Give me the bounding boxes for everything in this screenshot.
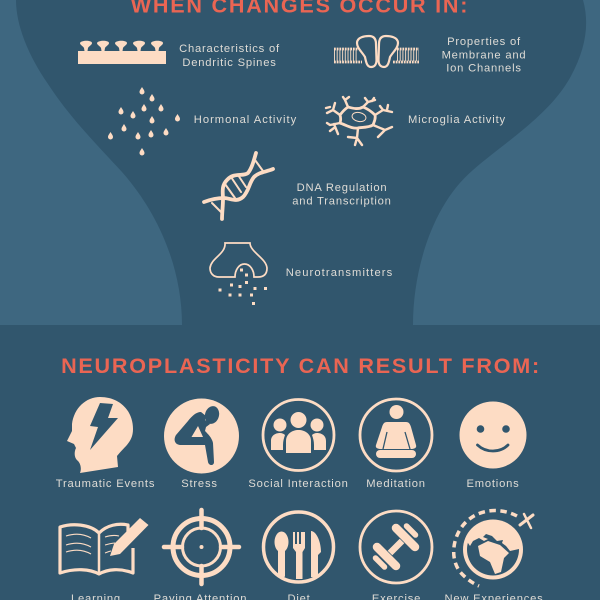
- label: dna regulation: and Transcription: [292, 195, 392, 207]
- icon: traumatic events head: [67, 397, 133, 473]
- label: neurotransmitters: Neurotransmitters: [286, 267, 393, 279]
- label: emotions: Emotions: [466, 478, 520, 490]
- label: stress: Stress: [181, 478, 218, 490]
- label: membrane: Ion Channels: [446, 63, 522, 75]
- icon: exercise dumbbell: [360, 511, 432, 583]
- funnel panel: [16, 0, 586, 325]
- label: membrane: Membrane and: [442, 49, 526, 61]
- icon: microglia: [326, 97, 392, 145]
- heading: neuroplasticity: NEUROPLASTICITY CAN RESULT FROM:: [61, 353, 541, 378]
- label: meditation: Meditation: [366, 478, 426, 490]
- label: dendritic spines: Dendritic Spines: [182, 57, 277, 69]
- label: traumatic events: Traumatic Events: [56, 478, 155, 490]
- icon: meditation: [360, 399, 432, 471]
- label: microglia activity: Microglia Activity: [408, 114, 506, 126]
- icon: stress: [164, 398, 239, 474]
- label: membrane: Properties of: [447, 36, 521, 48]
- label: dna regulation: DNA Regulation: [297, 182, 387, 194]
- label: dendritic spines: Characteristics of: [179, 43, 280, 55]
- icon: paying attention target: [164, 510, 239, 584]
- label: hormonal activity: Hormonal Activity: [194, 114, 297, 126]
- label: social interaction: Social Interaction: [248, 478, 349, 490]
- icon: neurotransmitter synapse: [210, 243, 267, 305]
- icon: social interaction: [263, 400, 334, 470]
- icon: dna helix: [204, 153, 273, 219]
- icon: new experiences globe: [454, 511, 533, 586]
- icon: learning book: [60, 518, 148, 574]
- icon: membrane and ion channels: [334, 36, 419, 67]
- icon: emotions smiley: [460, 402, 526, 468]
- icon: diet: [264, 512, 334, 582]
- icon: hormone drops: [108, 87, 180, 156]
- bottom panel: [0, 325, 600, 600]
- icon: dendritic spines: [78, 41, 166, 64]
